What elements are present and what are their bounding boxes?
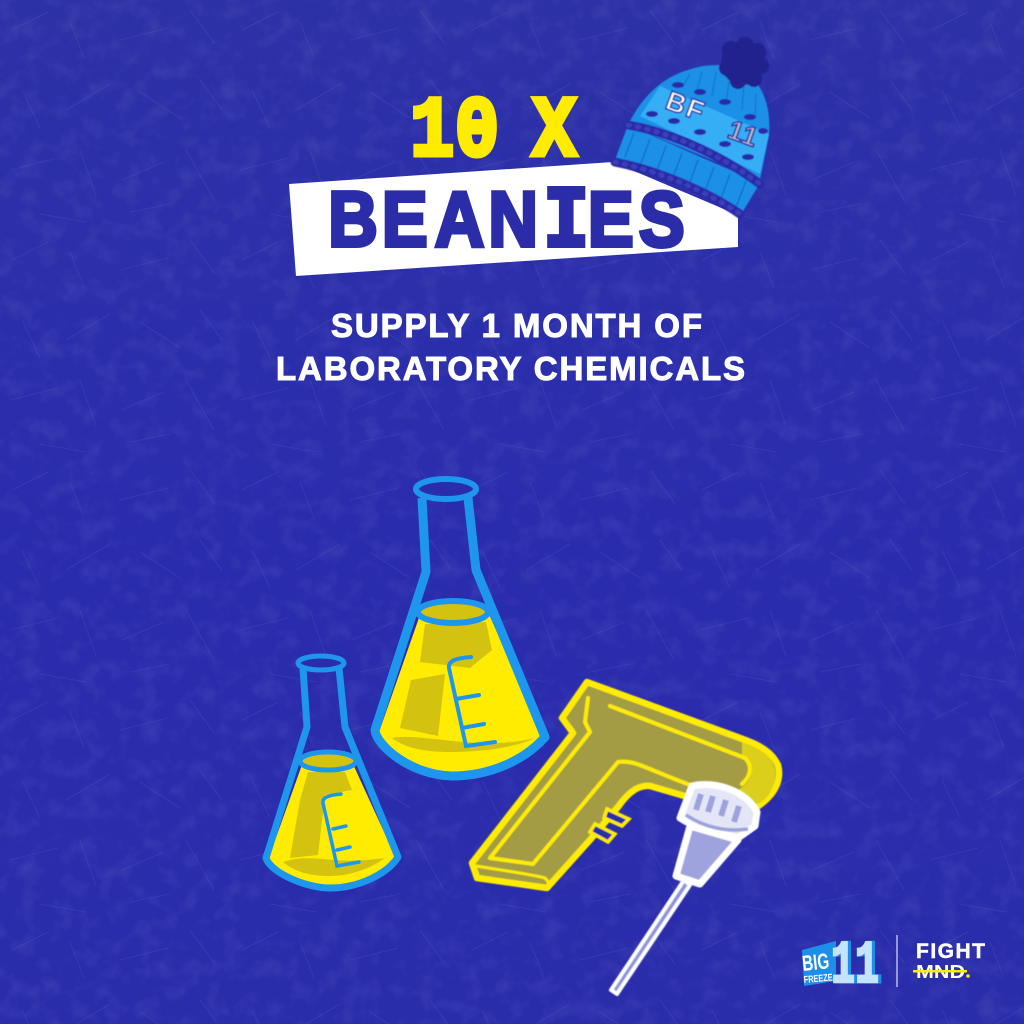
glass outline <box>266 668 398 888</box>
base edge <box>476 866 551 885</box>
liquid surface <box>418 601 488 623</box>
hat light stripe <box>640 86 769 174</box>
hat label BF 11 <box>662 85 763 153</box>
needle <box>611 880 690 994</box>
subtitle <box>276 307 745 387</box>
illustration: pipette tip <box>611 784 757 994</box>
icon: beanie hat <box>615 37 769 214</box>
liquid <box>378 612 543 776</box>
illustration: small flask <box>266 656 398 888</box>
MND: MND <box>916 962 965 982</box>
hat crown <box>628 65 769 180</box>
pompom <box>719 37 769 89</box>
glass outline <box>375 498 545 776</box>
body <box>472 682 779 888</box>
hat label BF 11: BF <box>662 85 710 127</box>
subtitle: SUPPLY 1 MONTH OF <box>331 307 702 344</box>
subtitle: LABORATORY CHEMICALS <box>276 350 745 387</box>
logo: Fight MND <box>913 940 985 982</box>
cap <box>680 784 757 838</box>
logo: Big Freeze 11 <box>801 933 882 1001</box>
heading: BEANIES: B <box>328 175 378 263</box>
inner contour <box>490 698 750 864</box>
illustration: pipette controller <box>472 682 779 888</box>
yellow strike and dot <box>913 970 970 978</box>
blue box <box>802 941 836 986</box>
number 11 shadow: 11 <box>834 933 882 1001</box>
illustration: large flask <box>375 479 545 776</box>
cone <box>676 826 738 884</box>
heading: BEANIES: E <box>382 175 428 263</box>
heading: BEANIES: I <box>543 173 589 273</box>
BIG FREEZE text <box>801 948 833 986</box>
BIG FREEZE text: BIG <box>801 948 830 976</box>
heading: BEANIES: S <box>639 175 685 263</box>
liquid <box>268 762 396 888</box>
highlight corner <box>738 742 775 804</box>
banner: white strip <box>289 162 738 276</box>
buttons <box>590 809 629 842</box>
FIGHT: FIGHT <box>916 940 985 963</box>
heading: BEANIES: N <box>488 175 538 263</box>
scale marks <box>449 657 495 746</box>
heading: 10 X: 0 <box>455 84 499 181</box>
heading: BEANIES: E <box>588 175 634 263</box>
logo divider <box>896 935 898 987</box>
rim <box>416 479 476 499</box>
flange <box>686 815 748 830</box>
scale marks <box>323 794 359 866</box>
hat label BF 11: 11 <box>724 114 763 153</box>
heading: 10 X: 1 <box>410 84 454 181</box>
BIG FREEZE text: FREEZE <box>803 972 833 986</box>
number 11: 11 <box>831 933 879 1001</box>
liquid surface <box>300 752 356 770</box>
stripe dots <box>646 82 768 160</box>
heading: BEANIES: A <box>435 175 484 263</box>
cuff ribs <box>625 133 746 207</box>
liquid shading <box>392 622 535 752</box>
rim <box>298 656 344 670</box>
crown ribs <box>684 72 756 118</box>
heading: 10 X: X <box>532 84 577 181</box>
liquid shading <box>283 772 385 876</box>
hat cuff <box>615 125 760 213</box>
cuff bands <box>615 125 760 214</box>
cap ridges <box>696 794 739 822</box>
